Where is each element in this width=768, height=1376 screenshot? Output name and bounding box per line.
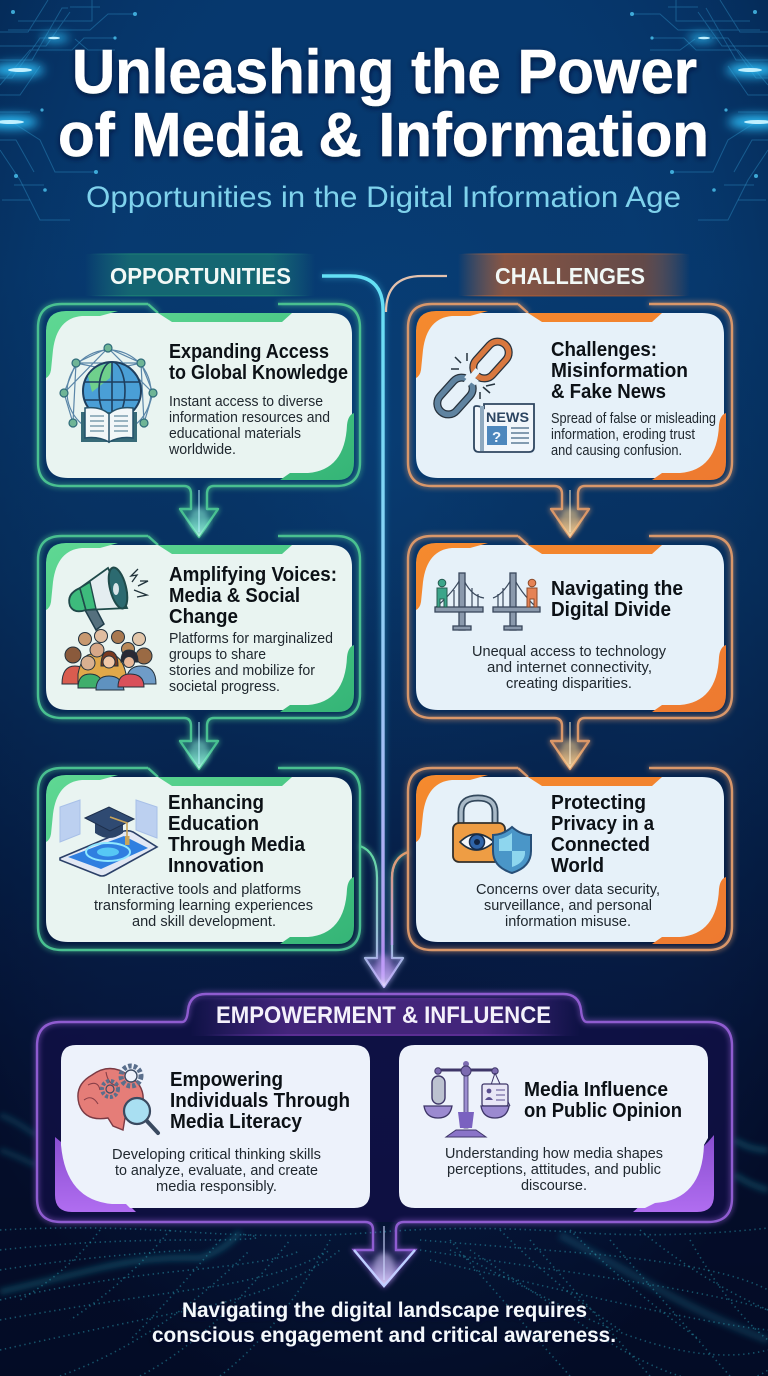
icon: broken chain and news bbox=[433, 337, 534, 452]
arrow: challenges 1 to 2 bbox=[551, 490, 589, 537]
arrow: down to footer bbox=[354, 1226, 415, 1286]
panel frame bbox=[37, 994, 732, 1286]
panel: misinformation: Spread of false or misleading bbox=[551, 411, 716, 427]
panel: privacy: information misuse. bbox=[505, 914, 631, 930]
circuit lines top left bbox=[0, 0, 135, 220]
panel: expanding access: educational materials bbox=[169, 426, 301, 442]
panel: privacy: Privacy in a bbox=[551, 813, 655, 835]
arrow: challenges 2 to 3 bbox=[551, 722, 589, 769]
panel: privacy bbox=[408, 768, 732, 950]
panel: enhancing education: Enhancing bbox=[168, 792, 264, 814]
icon: globe and book bbox=[60, 344, 157, 442]
panel: enhancing education: Innovation bbox=[168, 855, 264, 877]
card: media literacy: media responsibly. bbox=[156, 1179, 277, 1195]
panel: misinformation: & Fake News bbox=[551, 381, 666, 403]
arrow: opportunities 1 to 2 bbox=[180, 490, 218, 537]
header: opportunities: OPPORTUNITIES bbox=[110, 263, 291, 289]
icon: brain with gears and magnifier bbox=[78, 1066, 158, 1133]
panel: privacy: Connected bbox=[551, 834, 650, 856]
header: challenges: CHALLENGES bbox=[495, 263, 645, 289]
panel: enhancing education bbox=[38, 768, 360, 950]
subtitle: Opportunities in the Digital Information Age bbox=[86, 181, 681, 214]
header: opportunities bbox=[85, 253, 315, 297]
panel: misinformation bbox=[408, 304, 732, 537]
panel: privacy: Protecting bbox=[551, 792, 646, 814]
panel: enhancing education: transforming learning experiences bbox=[94, 898, 313, 914]
card: media literacy: Individuals Through bbox=[170, 1090, 350, 1112]
panel: amplifying voices: societal progress. bbox=[169, 679, 280, 695]
icon: padlock, eye and shield bbox=[453, 798, 531, 873]
panel: privacy: World bbox=[551, 855, 604, 877]
bottom dot wave pattern bbox=[0, 1115, 768, 1376]
panel: digital divide: and internet connectivity, bbox=[487, 660, 652, 676]
connector: central flow line to empowerment bbox=[322, 276, 447, 987]
card: media influence: discourse. bbox=[521, 1178, 587, 1194]
icon: broken chain and news: ? bbox=[492, 429, 501, 446]
panel: expanding access: Instant access to diverse bbox=[169, 394, 323, 410]
panel: enhancing education: and skill development. bbox=[132, 914, 276, 930]
icon: two bridges with people bbox=[435, 573, 540, 630]
circuit lines top right bbox=[632, 0, 768, 220]
panel: digital divide bbox=[408, 536, 732, 769]
icon: scales with microphone and profile card bbox=[424, 1061, 510, 1137]
title: Unleashing the Power bbox=[72, 38, 697, 107]
title: of Media & Information bbox=[58, 101, 709, 170]
panel: digital divide: Digital Divide bbox=[551, 599, 671, 621]
header: challenges bbox=[458, 253, 690, 297]
panel: privacy: Concerns over data security, bbox=[476, 882, 660, 898]
panel: misinformation: information, eroding trust bbox=[551, 427, 695, 443]
panel: expanding access: to Global Knowledge bbox=[169, 362, 348, 384]
panel: misinformation: Challenges: bbox=[551, 339, 657, 361]
card: media literacy: Media Literacy bbox=[170, 1111, 303, 1133]
panel: expanding access bbox=[38, 304, 360, 537]
footer text: conscious engagement and critical awareness. bbox=[152, 1324, 616, 1347]
heading: empowerment band: EMPOWERMENT & INFLUENCE bbox=[216, 1002, 551, 1029]
card: media influence: on Public Opinion bbox=[524, 1100, 682, 1122]
panel: enhancing education: Interactive tools and platforms bbox=[107, 882, 301, 898]
title bbox=[58, 38, 709, 170]
icon: megaphone and crowd bbox=[62, 566, 156, 690]
panel: amplifying voices: stories and mobilize for bbox=[169, 663, 315, 679]
panel: misinformation: and causing confusion. bbox=[551, 443, 682, 459]
panel: expanding access: information resources and bbox=[169, 410, 330, 426]
heading: empowerment band bbox=[190, 998, 580, 1036]
icon: broken chain and news: NEWS bbox=[486, 410, 529, 425]
card: media literacy: Developing critical thinking skills bbox=[112, 1147, 321, 1163]
card: media influence: perceptions, attitudes, and public bbox=[447, 1162, 661, 1178]
card: media influence: Understanding how media shapes bbox=[445, 1146, 663, 1162]
card: media influence: Media Influence bbox=[524, 1079, 668, 1101]
panel: digital divide: Unequal access to technology bbox=[472, 644, 667, 660]
panel: amplifying voices: Platforms for marginalized bbox=[169, 631, 333, 647]
card: media literacy bbox=[55, 1045, 370, 1212]
panel: digital divide: creating disparities. bbox=[506, 676, 632, 692]
card: media literacy: Empowering bbox=[170, 1069, 283, 1091]
footer text bbox=[152, 1299, 616, 1347]
panel: amplifying voices: groups to share bbox=[169, 647, 266, 663]
panel: enhancing education: Through Media bbox=[168, 834, 306, 856]
card: media influence bbox=[399, 1045, 714, 1212]
panel: expanding access: worldwide. bbox=[168, 442, 236, 458]
panel: digital divide: Navigating the bbox=[551, 578, 683, 600]
panel: amplifying voices bbox=[38, 536, 360, 769]
panel: empowerment and influence bbox=[37, 994, 732, 1286]
footer text: Navigating the digital landscape requires bbox=[182, 1299, 587, 1322]
icon: tablet and graduation cap bbox=[60, 800, 157, 876]
panel: privacy: surveillance, and personal bbox=[484, 898, 652, 914]
panel: amplifying voices: Media & Social bbox=[169, 585, 300, 607]
panel: misinformation: Misinformation bbox=[551, 360, 688, 382]
arrow: opportunities 2 to 3 bbox=[180, 722, 218, 769]
card: media literacy: to analyze, evaluate, and create bbox=[115, 1163, 318, 1179]
panel: amplifying voices: Amplifying Voices: bbox=[169, 564, 337, 586]
panel: amplifying voices: Change bbox=[169, 606, 238, 628]
panel: enhancing education: Education bbox=[168, 813, 259, 835]
circuit glow lights bbox=[0, 10, 768, 192]
panel: expanding access: Expanding Access bbox=[169, 341, 329, 363]
